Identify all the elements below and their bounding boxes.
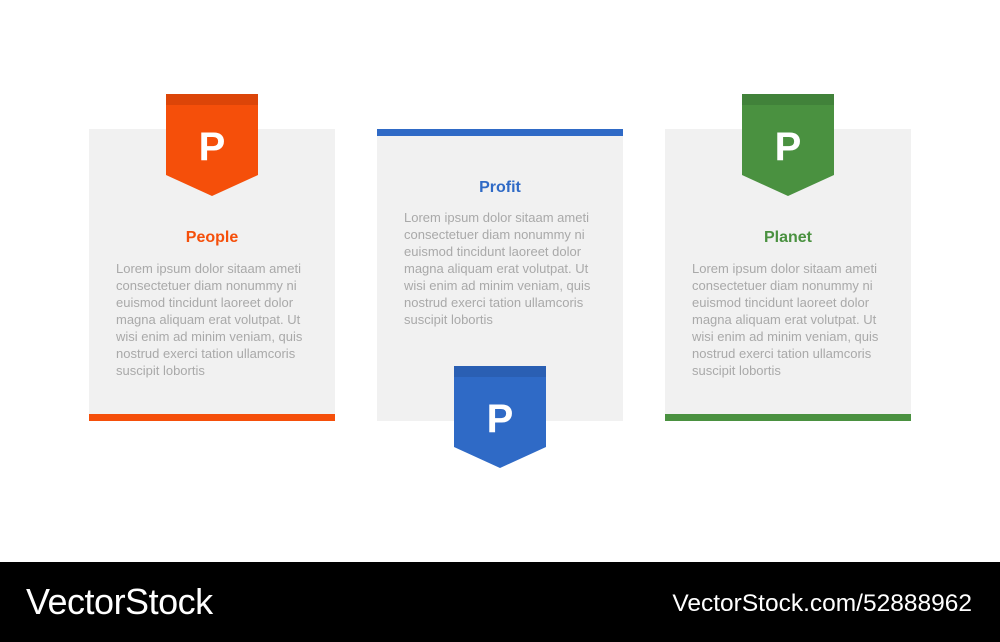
text: profit: wisi enim ad minim veniam, quis [404, 278, 590, 293]
text: profit: euismod tincidunt laoreet dolor [404, 244, 581, 259]
text: people: nostrud exerci tation ullamcoris [116, 346, 295, 361]
text: people [116, 261, 302, 378]
icon: profit ribbon [454, 366, 546, 468]
footer [0, 562, 1000, 642]
panel: profit [377, 129, 623, 421]
text: planet: consectetuer diam nonummy ni [692, 278, 873, 293]
title: profit: Profit [479, 179, 521, 196]
bottom bar [665, 414, 911, 421]
text: people: magna aliquam erat volutpat. Ut [116, 312, 300, 327]
text: people: Lorem ipsum dolor sitaam ameti [116, 261, 301, 276]
text: planet: nostrud exerci tation ullamcoris [692, 346, 871, 361]
icon: people ribbon [166, 94, 258, 196]
text: people: euismod tincidunt laoreet dolor [116, 295, 293, 310]
title: people: People [186, 229, 238, 246]
footer url: VectorStock.com/52888962 [672, 590, 972, 617]
panel: people [89, 129, 335, 421]
footer logo: VectorStock [26, 581, 213, 622]
text: people: consectetuer diam nonummy ni [116, 278, 297, 293]
title: planet: Planet [764, 229, 812, 246]
panel: planet [665, 129, 911, 421]
text: planet [692, 261, 878, 378]
text: profit [404, 210, 590, 327]
top bar [377, 129, 623, 136]
icon: planet ribbon: P [775, 125, 801, 169]
icon: people ribbon: P [199, 125, 225, 169]
text: profit: suscipit lobortis [404, 312, 493, 327]
text: profit: consectetuer diam nonummy ni [404, 227, 585, 242]
text: people: suscipit lobortis [116, 363, 205, 378]
text: profit: nostrud exerci tation ullamcoris [404, 295, 583, 310]
text: planet: suscipit lobortis [692, 363, 781, 378]
icon: planet ribbon [742, 94, 834, 196]
text: profit: magna aliquam erat volutpat. Ut [404, 261, 588, 276]
text: planet: Lorem ipsum dolor sitaam ameti [692, 261, 877, 276]
text: people: wisi enim ad minim veniam, quis [116, 329, 302, 344]
text: planet: euismod tincidunt laoreet dolor [692, 295, 869, 310]
icon: profit ribbon: P [487, 397, 513, 441]
text: planet: wisi enim ad minim veniam, quis [692, 329, 878, 344]
text: profit: Lorem ipsum dolor sitaam ameti [404, 210, 589, 225]
bottom bar [89, 414, 335, 421]
text: planet: magna aliquam erat volutpat. Ut [692, 312, 876, 327]
